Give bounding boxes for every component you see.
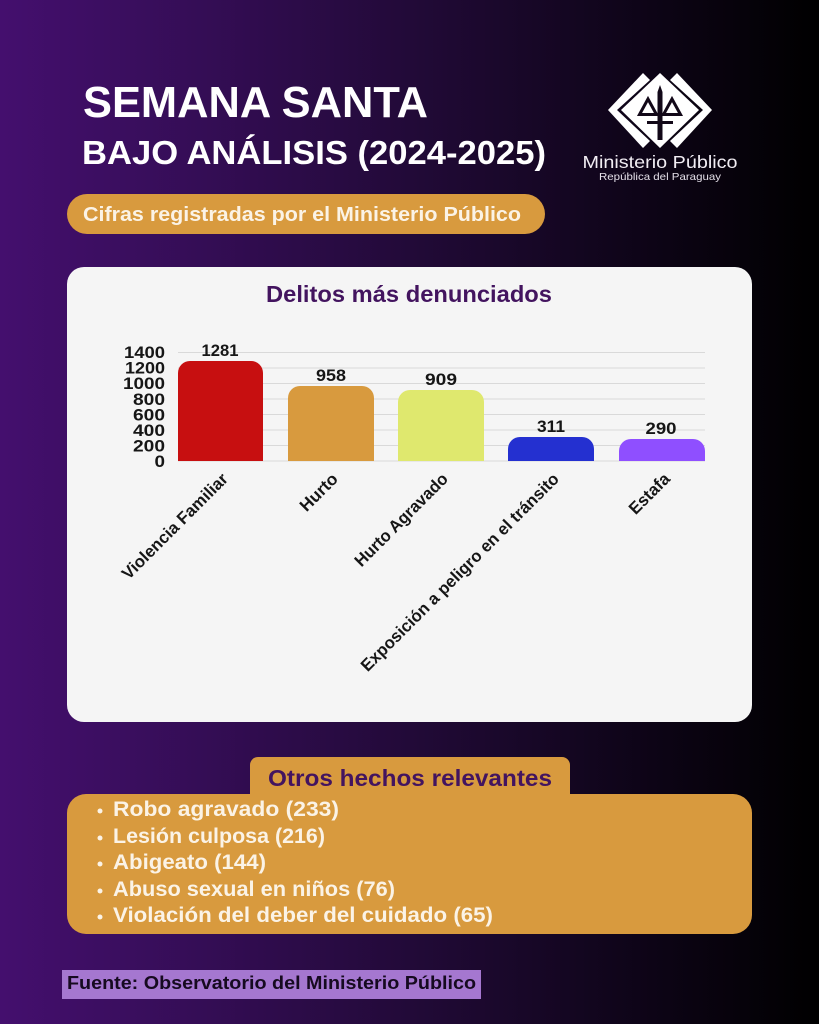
tab heading: Otros hechos relevantes bbox=[268, 765, 552, 791]
y axis labels: 1400 bbox=[124, 343, 165, 362]
title bbox=[82, 78, 546, 171]
category labels: Exposición a peligro en el tránsito bbox=[357, 469, 563, 675]
y axis labels: 200 bbox=[133, 436, 165, 456]
logo: Ministerio Público: Ministerio Público bbox=[582, 152, 738, 172]
value labels bbox=[202, 342, 676, 438]
bar: Exposición a peligro en el tránsito bbox=[508, 437, 594, 461]
title: BAJO ANÁLISIS (2024-2025) bbox=[82, 134, 546, 171]
value labels: 958 bbox=[316, 367, 346, 385]
panel: otros hechos relevantes bbox=[67, 757, 752, 934]
source note: Fuente: Observatorio del Ministerio Público bbox=[67, 972, 476, 993]
chart heading: Delitos más denunciados bbox=[266, 281, 552, 307]
bar: Hurto Agravado bbox=[398, 390, 484, 461]
category labels: Estafa bbox=[625, 469, 674, 518]
list of other crimes: Abigeato (144) bbox=[113, 851, 266, 874]
category labels bbox=[118, 469, 674, 675]
title: SEMANA SANTA bbox=[83, 78, 428, 127]
y axis labels: 400 bbox=[133, 421, 165, 440]
value labels: 1281 bbox=[202, 342, 238, 360]
bar: Estafa bbox=[619, 439, 705, 461]
y axis labels bbox=[123, 343, 165, 471]
subtitle pill: Cifras registradas por el Ministerio Público bbox=[83, 203, 521, 226]
logo: Ministerio Público bbox=[582, 73, 738, 183]
list of other crimes: Lesión culposa (216) bbox=[113, 825, 325, 848]
value labels: 909 bbox=[425, 371, 457, 389]
list of other crimes: Violación del deber del cuidado (65) bbox=[113, 904, 493, 927]
y axis labels: 600 bbox=[133, 406, 165, 424]
bar: Violencia Familiar bbox=[178, 361, 263, 461]
y axis labels: 1200 bbox=[125, 358, 165, 378]
list of other crimes bbox=[98, 798, 493, 927]
bar: Hurto bbox=[288, 386, 374, 461]
y axis labels: 800 bbox=[133, 390, 165, 409]
icon: scales of justice in diamond bbox=[608, 73, 712, 148]
value labels: 290 bbox=[646, 420, 676, 438]
list of other crimes: Abuso sexual en niños (76) bbox=[113, 878, 395, 901]
y axis labels: 0 bbox=[154, 452, 165, 471]
tab heading bbox=[250, 757, 570, 800]
category labels: Hurto bbox=[296, 469, 342, 515]
panel: chart card bbox=[67, 267, 752, 722]
category labels: Hurto Agravado bbox=[351, 469, 452, 571]
logo: Ministerio Público: República del Paraguay bbox=[599, 171, 722, 183]
list of other crimes: Robo agravado (233) bbox=[113, 798, 339, 821]
category labels: Violencia Familiar bbox=[118, 469, 232, 583]
y axis labels: 1000 bbox=[123, 374, 165, 393]
bar chart bbox=[118, 342, 705, 675]
subtitle pill bbox=[67, 194, 545, 234]
value labels: 311 bbox=[537, 418, 565, 436]
source note bbox=[62, 970, 481, 999]
